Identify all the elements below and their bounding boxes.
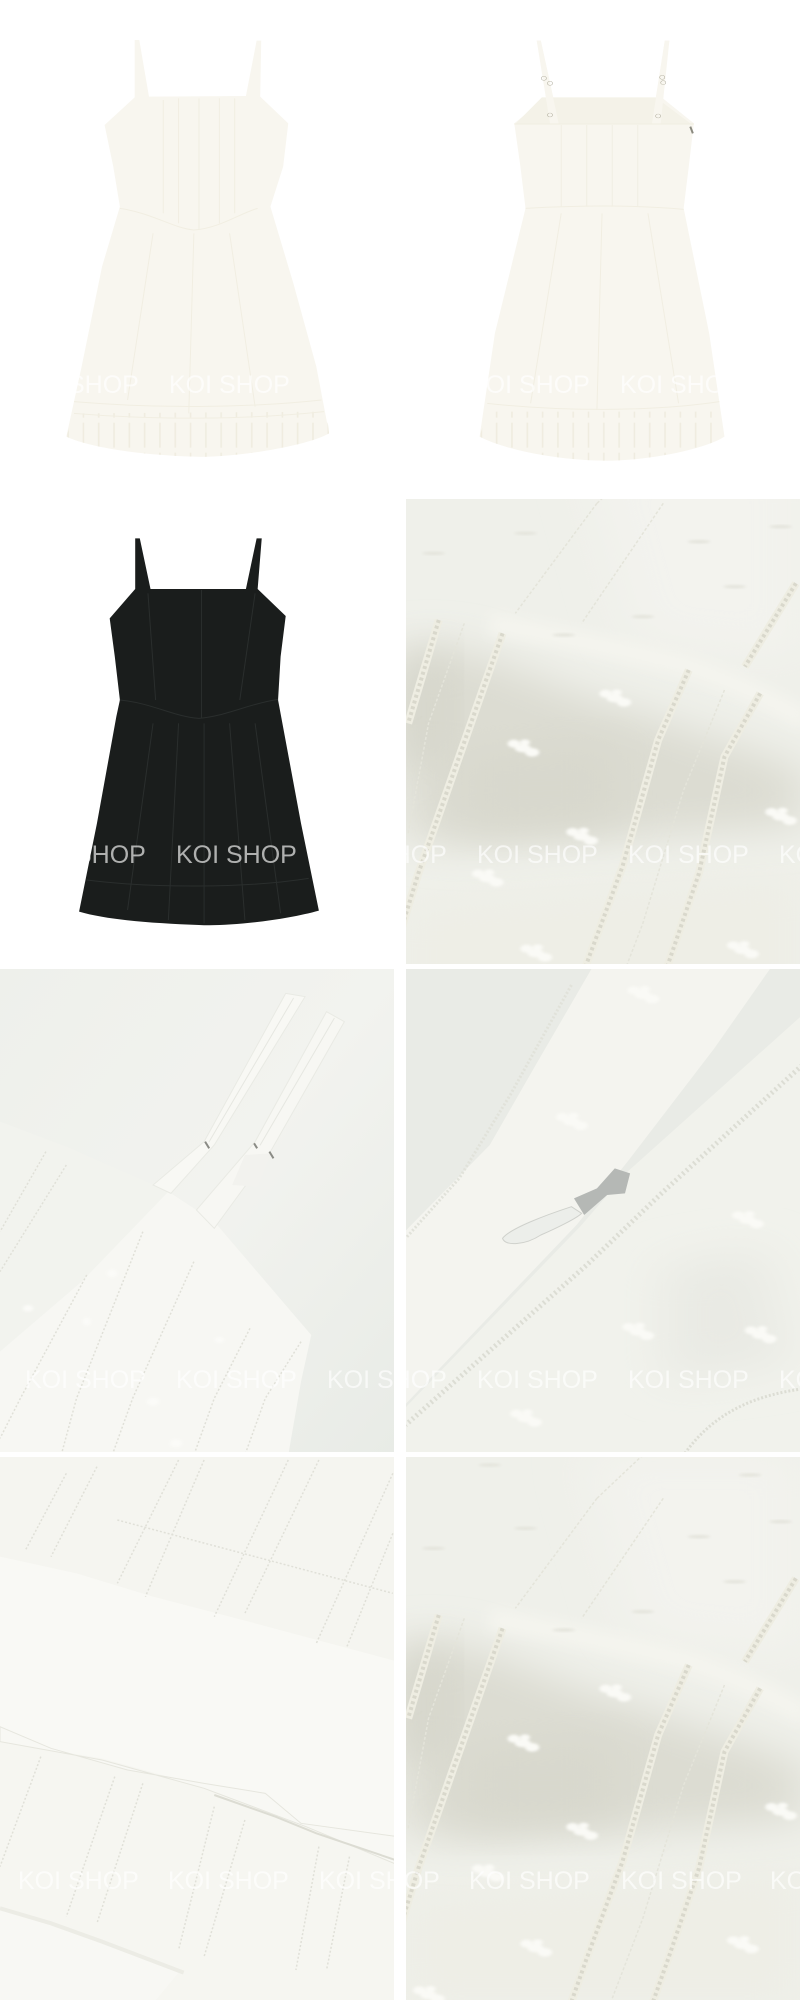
- watermark: KOI SHOP: [628, 1366, 749, 1394]
- black dress silhouette: [79, 538, 319, 925]
- panel: black dress: [79, 538, 319, 926]
- watermark: [76, 376, 288, 393]
- watermark: KOI SHOP: [628, 841, 749, 869]
- dress left piece: [403, 968, 770, 1407]
- panel: white dress back: [480, 40, 724, 461]
- watermark: KOI SHOP: [176, 1366, 297, 1394]
- watermark: KOI SHOP: [469, 1867, 590, 1895]
- panel: hem and lining close-up: [0, 1457, 394, 2000]
- straps: [153, 993, 344, 1228]
- dress right piece: [403, 1012, 800, 1455]
- fabric artwork: [393, 1452, 800, 2000]
- stitching: [406, 985, 800, 1455]
- watermark: KOI SHOP: [621, 1867, 742, 1895]
- watermark: [18, 1867, 440, 1895]
- watermark: KOI SHOP: [620, 371, 741, 399]
- panel: fabric close-up repeat: [319, 1452, 800, 2000]
- strap hardware: [205, 1142, 273, 1158]
- dress front layer: [124, 1282, 311, 1452]
- panel: strap close-up: [0, 969, 394, 1452]
- strap hardware: [541, 75, 693, 133]
- lower fabric lines: [0, 1757, 349, 1970]
- watermark: KOI SHOP: [319, 1867, 440, 1895]
- watermark: KOI SHOP: [319, 1867, 440, 1895]
- panel: white dress front: [66, 40, 329, 457]
- raw hem edge: [0, 1727, 398, 1865]
- watermark: KOI SHOP: [168, 1867, 289, 1895]
- bodice pleats and seams: [74, 98, 324, 418]
- watermark: [319, 1867, 800, 1895]
- bottom corner: [0, 1910, 179, 2000]
- watermark: [27, 1370, 392, 1388]
- fabric artwork: [406, 499, 800, 964]
- panel: zipper close-up: [406, 969, 800, 1452]
- watermark: KOI SHOP: [477, 841, 598, 869]
- panel: fabric close-up: [406, 499, 800, 964]
- back straps over facing: [538, 52, 547, 97]
- watermark: KOI SHOP: [320, 371, 441, 399]
- dress front silhouette: [66, 40, 329, 457]
- watermark: KOI SHOP: [327, 841, 448, 869]
- upper fabric lines: [26, 1460, 393, 1647]
- hem fringe: [480, 412, 724, 461]
- inner neckline facing: [524, 98, 656, 116]
- upper fabric layer: [0, 1450, 398, 1662]
- pleats and seams: [487, 124, 719, 410]
- watermark: [406, 845, 800, 863]
- watermark: KOI SHOP: [469, 371, 590, 399]
- watermark: KOI SHOP: [318, 371, 439, 399]
- dress ribs and seams: [87, 590, 309, 923]
- stripes on dress: [0, 1152, 301, 1455]
- watermark: KOI SHOP: [176, 841, 297, 869]
- watermark: KOI SHOP: [477, 1366, 598, 1394]
- dress back layer: [0, 1122, 168, 1352]
- lower fabric layer: [0, 1740, 398, 2000]
- watermark: KOI SHOP: [25, 841, 146, 869]
- watermark: KOI SHOP: [327, 1366, 448, 1394]
- watermark: [89, 845, 296, 863]
- dress back silhouette: [480, 99, 724, 460]
- soft shading: [663, 1248, 791, 1382]
- watermark: [487, 376, 718, 393]
- watermark: KOI SHOP: [25, 1366, 146, 1394]
- zipper slider: [503, 1168, 630, 1244]
- watermark: KOI SHOP: [326, 841, 447, 869]
- watermark: KOI SHOP: [169, 371, 290, 399]
- watermark: KOI SHOP: [18, 371, 139, 399]
- tufts: [512, 1212, 776, 1426]
- watermark: KOI SHOP: [18, 1867, 139, 1895]
- watermark: KOI SHOP: [326, 1366, 447, 1394]
- watermark: [406, 1370, 800, 1388]
- hem fringe: [66, 412, 329, 457]
- hem crease: [214, 1795, 395, 1860]
- dots on dress: [26, 1306, 31, 1310]
